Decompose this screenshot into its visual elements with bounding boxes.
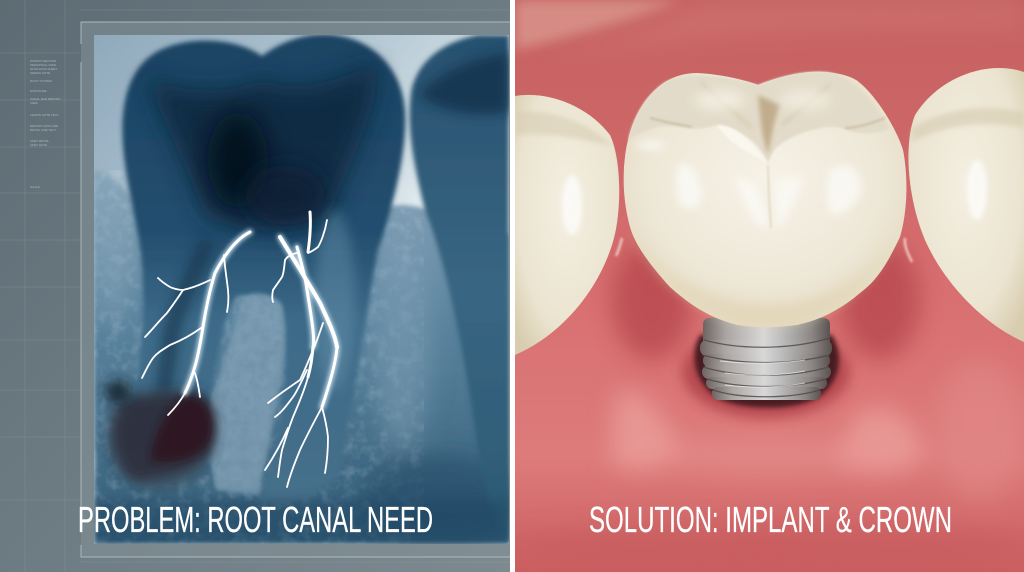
socket halo — [682, 326, 850, 418]
panel: small technical text column: CANAL MAP REPORT — [30, 97, 61, 101]
lower shadow for caption — [94, 500, 509, 544]
shadow around teeth — [612, 240, 920, 360]
bone grain — [94, 170, 424, 544]
panel: small technical text column: VIEW — [30, 101, 38, 105]
left tooth — [515, 95, 619, 355]
central groove — [758, 95, 780, 155]
crown — [624, 72, 906, 327]
left tooth highlight — [562, 175, 582, 235]
right tooth — [908, 68, 1024, 342]
crown highlights — [636, 140, 862, 230]
technical backdrop with grid — [0, 0, 510, 572]
panel: small technical text column: APEX NOTE — [30, 143, 47, 147]
panel: small technical text column — [30, 59, 61, 189]
panel: small technical text column: ROOT SYSTEM — [30, 79, 52, 83]
panel: small technical text column: SCALE — [30, 185, 40, 189]
panel: problem (x-ray) — [0, 0, 520, 572]
glowing canals — [142, 212, 337, 487]
gum papilla marks — [616, 238, 912, 262]
caption: problem: PROBLEM: ROOT CANAL NEED — [78, 499, 433, 540]
bone finger speckle — [214, 302, 280, 480]
implant abutment and screw — [695, 318, 839, 408]
x-ray image — [94, 34, 520, 545]
frame panel fill — [81, 22, 510, 557]
divider — [510, 0, 515, 572]
dark pulp chamber — [145, 62, 377, 231]
upper lip fold — [515, 0, 680, 50]
root tip lesion — [104, 380, 217, 490]
occlusal surface — [628, 72, 890, 163]
bright zone of right root — [315, 210, 355, 390]
soft bone patches — [98, 244, 509, 544]
right tooth occlusal edge — [912, 108, 1024, 142]
panel: small technical text column: LESION NOTE TEXT — [30, 113, 59, 117]
panel: small technical text column: APEX DETAIL — [30, 139, 49, 143]
panel: solution (implant and crown) — [500, 0, 1024, 572]
gum background — [515, 0, 1024, 572]
panel: small technical text column: REPORT DATA LINE — [30, 124, 58, 128]
bone tissue — [94, 170, 509, 544]
gum sheen — [605, 368, 1016, 534]
right neighbouring tooth — [410, 35, 509, 544]
dark streak in left root — [162, 240, 208, 400]
lower body warm shading — [634, 240, 890, 328]
main molar body — [118, 34, 405, 504]
panel: small technical text column: PERIAPICAL VIEW — [30, 63, 56, 67]
left tooth occlusal edge — [517, 112, 608, 144]
right tooth highlight — [967, 160, 987, 220]
inter-root bone finger — [208, 296, 284, 495]
decorative frame corner marks — [81, 22, 510, 557]
ridge highlight — [718, 124, 763, 159]
panel: small technical text column: EXPOSURE — [30, 89, 47, 93]
panel: small technical text column: SCAN DATA SHEET — [30, 67, 58, 71]
panel: small technical text column: PATIENT RECORD — [30, 59, 57, 63]
panel: small technical text column: DETAIL LINE TEXT — [30, 128, 56, 132]
panel: small technical text column: SERIES NOTE — [30, 71, 50, 75]
